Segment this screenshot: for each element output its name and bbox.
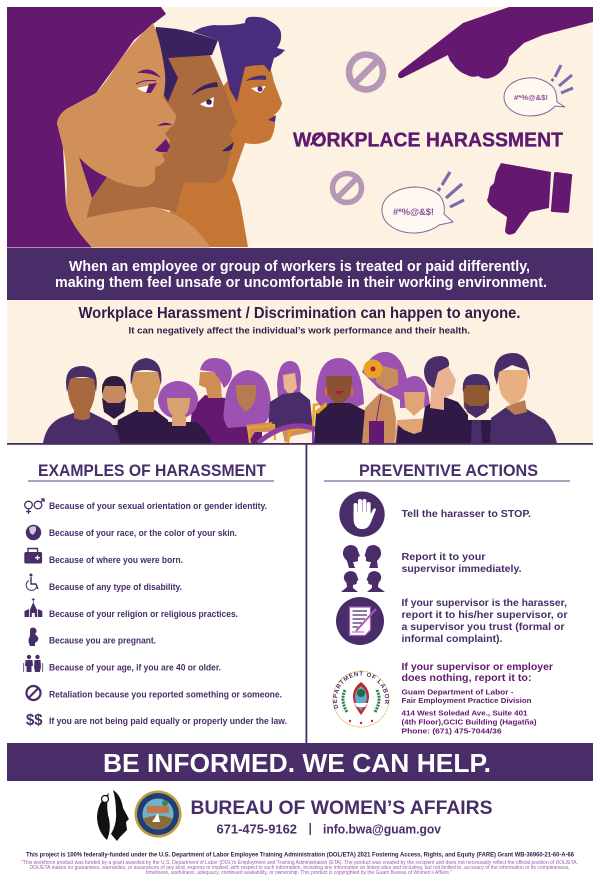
text: supervisor is the harasser: a supervisor you trust (formal or (402, 621, 564, 633)
footer: disclaimer: "This workforce product was funded by a grant awarded by the U.S. Department of Labor (DOL)'s Employment and Training Administration (ETA). The product was created by the recipient and does not necessarily reflect the official position of DOL/ETA. (21, 860, 578, 866)
back person: orange profile (170, 17, 285, 247)
list of examples: Because you are pregnant. (49, 636, 156, 646)
icon: prohibition sign upper (349, 54, 383, 90)
person 3 (115, 358, 172, 443)
organization name: BUREAU OF WOMEN’S AFFAIRS (190, 797, 492, 819)
text: employer does nothing: does nothing, report it to: (402, 672, 532, 684)
middle person: brown profile (86, 27, 237, 219)
exclamation marks upper (552, 65, 573, 93)
person 11 profile man (420, 356, 468, 443)
speech bubble lower: #*%@&$! (393, 207, 434, 218)
icon: globe (26, 525, 41, 540)
person 12 bearded dark skin (442, 374, 509, 443)
footer: disclaimer: DOL/ETA makes no guarantees, warranties, or assurances of any kind, express or implied, with respect to such information, including any information on linked sites and including, but not limited to, accuracy of the information or its completeness, (30, 865, 570, 871)
icon: dollar signs: $$ (26, 712, 43, 729)
list of examples (49, 501, 287, 726)
wheelchair (248, 403, 328, 443)
contact line: info.bwa@guam.gov (323, 822, 442, 836)
logo: department of labor seal: DEPARTMENT OF LABOR (332, 672, 390, 709)
panel: be informed banner (7, 744, 593, 781)
text: employer does nothing: If your supervisor or employer (402, 661, 553, 673)
panel: examples of harassment (23, 462, 287, 729)
person 7 wheelchair user (246, 361, 313, 443)
icon: complaint document (336, 597, 384, 645)
person 2 bearded (100, 376, 128, 443)
text: guam department of labor contact: Guam Department of Labor - (402, 688, 514, 696)
speech bubble upper (504, 78, 565, 116)
text: supervisor is the harasser: report it to his/her supervisor, or (402, 609, 568, 621)
text: supervisor is the harasser: informal complaint). (402, 633, 503, 645)
divider lines (7, 443, 593, 744)
definition text: When an employee or group of workers is treated or paid differently, (69, 258, 530, 275)
icon: briefcase (24, 548, 42, 564)
text: employer does nothing (402, 661, 553, 684)
text: guam department of labor contact: Fair Employment Practice Division (402, 696, 532, 705)
heading: examples of harassment: EXAMPLES OF HARASSMENT (38, 462, 266, 480)
definition text (55, 258, 547, 291)
person 13 right man (490, 353, 557, 443)
icon: church (24, 598, 42, 617)
list of examples: Because of where you were born. (49, 555, 183, 565)
person 6 wavy hair (224, 370, 271, 443)
list of examples: Because of your sexual orientation or gender identity. (49, 501, 267, 511)
icon: prohibition (26, 686, 40, 700)
person 5 curly profile (189, 358, 232, 443)
list of examples: If you are not being paid equally or properly under the law. (49, 716, 287, 726)
banner text: BE INFORMED. WE CAN HELP. (103, 748, 491, 778)
exclamation marks lower (438, 172, 464, 207)
contact line: 671-475-9162 (216, 822, 297, 836)
logo: woman silhouette (97, 790, 129, 841)
icon: prohibition sign lower (332, 174, 362, 202)
text: guam department of labor contact (402, 688, 537, 736)
panel: preventive actions (324, 462, 570, 736)
person 1 (43, 366, 120, 443)
woman: front profile with long hair (7, 7, 210, 248)
text: supervisor is the harasser: If your supervisor is the harasser, (402, 597, 567, 609)
icon: people talking (341, 545, 385, 592)
list of examples: Retaliation because you reported something or someone. (49, 690, 282, 700)
footer: disclaimer: timeliness, usefulness, adequacy, continued availability, or ownership. This product is copyrighted by the Guam Bureau of Women's Affairs." (146, 870, 452, 876)
text: report to supervisor: supervisor immediately. (402, 563, 522, 575)
icon: pregnant woman (28, 628, 38, 646)
flower (364, 360, 382, 378)
speech bubble lower (382, 187, 453, 233)
text: guam department of labor contact: (4th Floor),GCIC Building (Hagatña) (402, 718, 537, 726)
icon: wheelchair (26, 574, 38, 590)
text: supervisor is the harasser (402, 597, 568, 645)
illustration: group of diverse people (43, 352, 557, 443)
person 10 woman with bangs (394, 376, 444, 443)
speech bubble upper: #*%@&$! (514, 93, 548, 102)
panel: hero illustration (7, 7, 593, 248)
text: report to supervisor (402, 551, 522, 575)
text: guam department of labor contact: Phone: (671) 475-7044/36 (402, 726, 502, 736)
logo: department of labor seal (332, 670, 390, 728)
icon: stop hand (339, 492, 385, 537)
contact line (216, 822, 442, 836)
list of examples: Because of any type of disability. (49, 582, 182, 592)
person 8 center woman (314, 358, 370, 443)
panel: can happen to anyone (7, 300, 593, 443)
icon: elderly couple (23, 655, 43, 672)
footer: disclaimer (21, 860, 578, 876)
panel: definition band (7, 248, 593, 300)
person 4 curly hair (143, 381, 212, 443)
list of examples: Because of your religion or religious practices. (49, 609, 238, 619)
icon: pointing hand (398, 7, 593, 79)
list of examples: Because of your age, if you are 40 or older. (49, 662, 221, 672)
heading: can happen to anyone: Workplace Harassment / Discrimination can happen to anyone. (78, 305, 520, 322)
text: report to supervisor: Report it to your (402, 551, 486, 563)
list of examples: Because of your race, or the color of your skin. (49, 528, 237, 538)
logo: bureau seal (134, 790, 182, 838)
text: tell harasser to stop: Tell the harasser to STOP. (402, 508, 531, 520)
text: guam department of labor contact: 414 West Soledad Ave., Suite 401 (402, 708, 528, 718)
definition text: making them feel unsafe or uncomfortable in their working environment. (55, 274, 547, 291)
icon: thumbs down (487, 163, 572, 235)
icon: gender symbols (25, 499, 44, 514)
person 9 woman with flower (362, 352, 408, 443)
title: WORKPLACE HARASSMENT (293, 130, 563, 152)
subheading: negative effects: It can negatively affect the individual’s work performance and their health. (128, 326, 470, 336)
heading: preventive actions: PREVENTIVE ACTIONS (359, 462, 538, 480)
